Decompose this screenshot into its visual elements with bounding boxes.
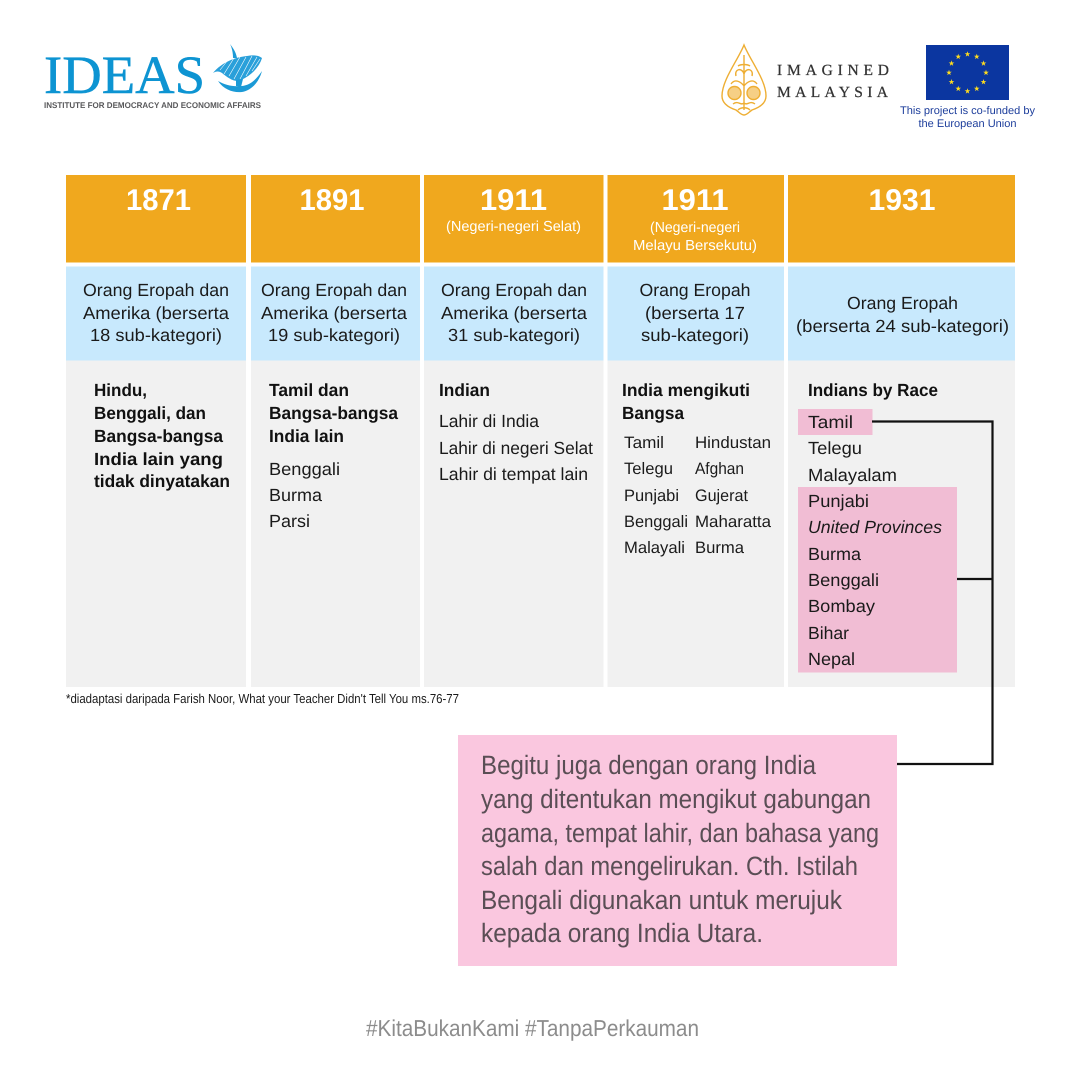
category 1911 Selat: 31 sub-kategori): [448, 325, 580, 345]
logo: EU flag and co-funding note: [900, 45, 1035, 130]
year header 1911 Melayu: (Negeri-negeri: [650, 220, 740, 236]
list 1911 Selat: [424, 360, 604, 687]
callout: [458, 735, 897, 966]
category 1871: 18 sub-kategori): [90, 325, 222, 345]
list 1931: United Provinces: [808, 517, 942, 537]
list 1871: India lain yang: [94, 449, 223, 469]
logo: EU flag and co-funding note: the European Union: [918, 118, 1016, 130]
list 1911 Melayu: Malayali: [624, 538, 685, 557]
list 1891: Bangsa-bangsa: [269, 403, 398, 423]
list 1911 Selat: Lahir di India: [439, 411, 539, 431]
list 1911 Melayu: Bangsa: [622, 403, 684, 423]
category 1931: [788, 266, 1015, 360]
category 1891: Amerika (berserta: [261, 303, 407, 323]
list 1871: Bangsa-bangsa: [94, 426, 223, 446]
year header 1871: [66, 175, 246, 262]
list 1911 Melayu: Benggali: [624, 512, 688, 531]
icon: IDEAS bird: [213, 44, 262, 92]
list 1931: Indians by Race: [808, 380, 938, 400]
list 1931: Burma: [808, 544, 861, 564]
category 1911 Melayu: sub-kategori): [641, 325, 749, 345]
list 1871: Benggali, dan: [94, 403, 206, 423]
list 1891: [251, 360, 420, 687]
logo: IDEAS: INSTITUTE FOR DEMOCRACY AND ECONOMIC AFFAIRS: [44, 100, 261, 110]
list 1891: Benggali: [269, 459, 340, 479]
list 1891: Burma: [269, 485, 322, 505]
list 1911 Selat: Lahir di tempat lain: [439, 464, 588, 484]
panel: column 1871: [66, 175, 246, 687]
list 1931: Malayalam: [808, 465, 897, 485]
panel: column 1931: [788, 175, 1015, 687]
list 1871: tidak dinyatakan: [94, 471, 230, 491]
year header 1911 Selat: 1911: [480, 184, 547, 217]
callout: agama, tempat lahir, dan bahasa yang: [481, 818, 879, 848]
list 1871: [66, 360, 246, 687]
category 1911 Melayu: Orang Eropah: [640, 280, 750, 300]
year header 1891: [251, 175, 420, 262]
panel: column 1911 Negeri-negeri Melayu Bersekutu: [608, 175, 784, 687]
year header 1911 Selat: [424, 175, 604, 262]
list 1891: Parsi: [269, 511, 310, 531]
callout: Begitu juga dengan orang India: [481, 750, 816, 780]
callout: yang ditentukan mengikut gabungan: [481, 784, 871, 814]
logo: EU flag and co-funding note: This project is co-funded by: [900, 105, 1035, 117]
year header 1931: [788, 175, 1015, 262]
list 1911 Melayu: Punjabi: [624, 486, 679, 505]
year header 1911 Melayu: 1911: [662, 184, 728, 217]
logo: IDEAS: [44, 44, 262, 110]
list 1911 Selat: Indian: [439, 380, 490, 400]
list 1911 Melayu: Maharatta: [695, 512, 772, 531]
list 1931: [788, 360, 1015, 687]
year header 1931: 1931: [868, 184, 936, 217]
list 1911 Melayu: Burma: [695, 538, 745, 557]
category 1911 Selat: Amerika (berserta: [441, 303, 587, 323]
list 1911 Melayu: Telegu: [624, 459, 673, 478]
list 1911 Melayu: Hindustan: [695, 433, 771, 452]
list 1931: Bihar: [808, 623, 849, 643]
logo: Imagined Malaysia: MALAYSIA: [777, 84, 889, 101]
category 1931: Orang Eropah: [847, 293, 958, 313]
panel: column 1911 Negeri-negeri Selat: [424, 175, 604, 687]
panel: column 1891: [251, 175, 420, 687]
year header 1911 Melayu: Melayu Bersekutu): [633, 238, 757, 254]
logo: IDEAS: IDEAS: [44, 45, 205, 105]
list 1931: Nepal: [808, 649, 855, 669]
year header 1911 Selat: (Negeri-negeri Selat): [446, 219, 581, 235]
hashtags: #KitaBukanKami #TanpaPerkauman: [366, 1015, 699, 1041]
icon: wayang puppet: [722, 45, 766, 115]
category 1911 Melayu: (berserta 17: [645, 303, 745, 323]
list 1911 Melayu: [608, 360, 784, 687]
callout: kepada orang India Utara.: [481, 918, 763, 948]
year header 1891: 1891: [300, 184, 364, 217]
category 1871: Amerika (berserta: [83, 303, 229, 323]
category 1891: [251, 266, 420, 360]
list 1891: Tamil dan: [269, 380, 349, 400]
list 1931: Tamil: [808, 412, 853, 432]
list 1911 Selat: Lahir di negeri Selat: [439, 438, 593, 458]
category 1911 Selat: [424, 266, 604, 360]
list 1911 Melayu: Gujerat: [695, 486, 748, 505]
callout: Bengali digunakan untuk merujuk: [481, 885, 843, 915]
year header 1911 Melayu: [608, 175, 784, 262]
year header 1871: 1871: [126, 184, 191, 217]
highlight: north Indian group: [798, 487, 957, 672]
category 1891: Orang Eropah dan: [261, 280, 407, 300]
list 1911 Melayu: India mengikuti: [622, 380, 750, 400]
category 1871: Orang Eropah dan: [83, 280, 229, 300]
category 1931: (berserta 24 sub-kategori): [796, 316, 1009, 336]
callout: salah dan mengelirukan. Cth. Istilah: [481, 851, 858, 881]
list 1931: Telegu: [808, 438, 862, 458]
category 1911 Selat: Orang Eropah dan: [441, 280, 587, 300]
list 1891: India lain: [269, 426, 344, 446]
category 1871: [66, 266, 246, 360]
footnote: *diadaptasi daripada Farish Noor, What your Teacher Didn't Tell You ms.76-77: [66, 691, 459, 706]
list 1931: Benggali: [808, 570, 879, 590]
list 1931: Punjabi: [808, 491, 869, 511]
highlight: Tamil: [798, 409, 872, 435]
category 1891: 19 sub-kategori): [268, 325, 400, 345]
logo: Imagined Malaysia: IMAGINED: [777, 62, 889, 79]
list 1931: Bombay: [808, 596, 875, 616]
logo: Imagined Malaysia: [722, 45, 889, 115]
list 1871: Hindu,: [94, 380, 147, 400]
list 1911 Melayu: Tamil: [624, 433, 664, 452]
arrow: connector from highlights to callout: [872, 422, 992, 764]
list 1911 Melayu: Afghan: [695, 459, 744, 478]
category 1911 Melayu: [608, 266, 784, 360]
